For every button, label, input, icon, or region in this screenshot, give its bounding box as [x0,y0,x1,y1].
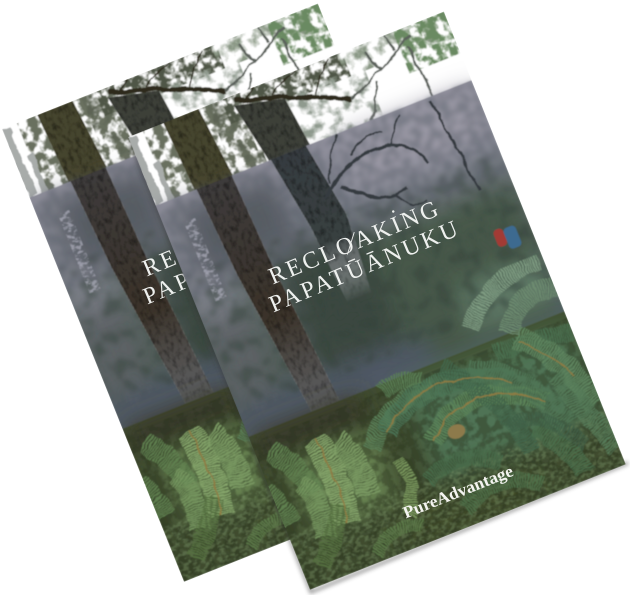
back cover title: RECLOAKING [139,188,316,282]
front cover shadow [129,139,628,592]
front cover title: PAPATŪĀNUKU [265,216,462,318]
front cover [123,10,630,592]
back cover title: PAPATŪĀNUKU [139,208,336,310]
front cover title: RECLOAKING [265,196,442,290]
back cover [2,4,334,582]
logo: Pure Advantage: PureAdvantage [400,461,516,522]
